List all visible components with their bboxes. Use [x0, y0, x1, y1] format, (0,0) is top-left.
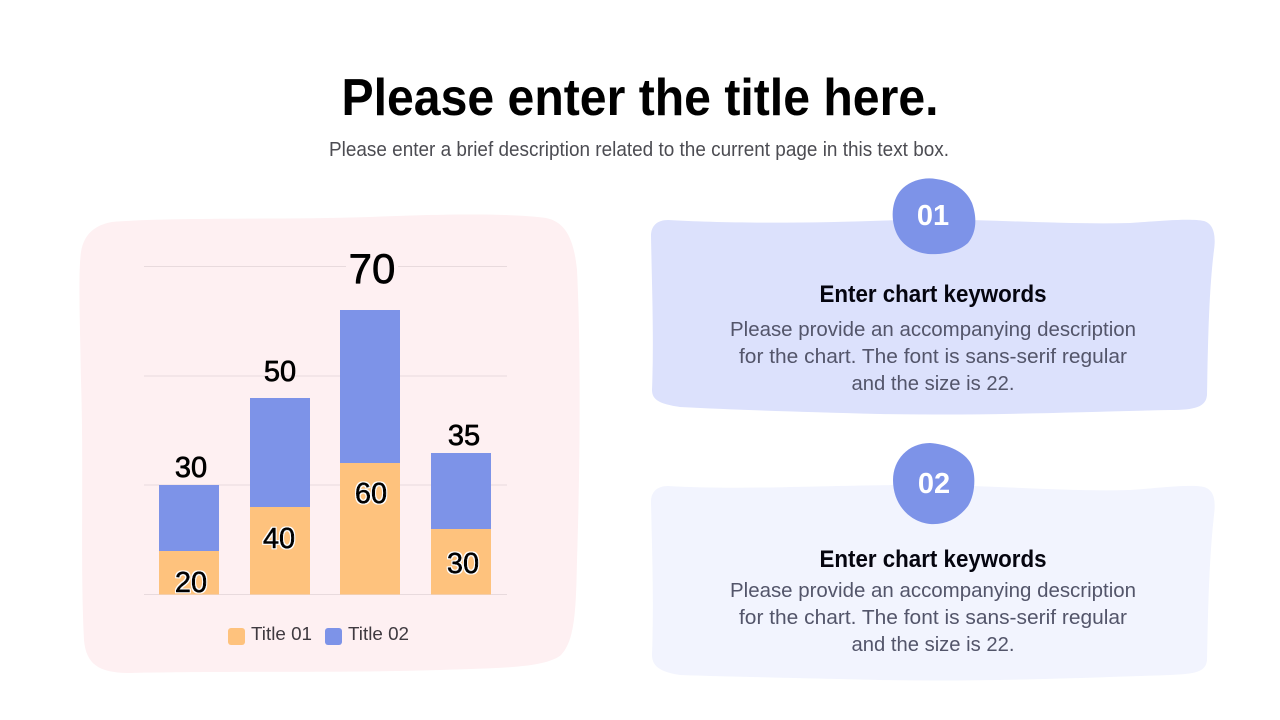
- panel: keyword 01: [651, 178, 1215, 415]
- card description: Please provide an accompanying description: [730, 580, 1136, 602]
- label 70: 70: [349, 245, 395, 292]
- legend text: Title 02: Title 02: [348, 624, 409, 644]
- bar: group 1: [159, 485, 219, 594]
- bar chart: [159, 310, 491, 594]
- value labels: 35: [448, 420, 480, 452]
- card description: for the chart. The font is sans-serif regular: [739, 607, 1127, 629]
- legend text: Title 01: Title 01: [251, 624, 312, 644]
- legend swatch: Title 01: [228, 628, 245, 645]
- card description: [730, 319, 1136, 395]
- gridlines: [144, 266, 507, 594]
- panel: keyword 02: [651, 443, 1215, 681]
- card description: Please provide an accompanying description: [730, 319, 1136, 341]
- card heading: Enter chart keywords: [820, 546, 1046, 573]
- value labels: 40: [263, 523, 295, 555]
- value labels: 30: [175, 452, 207, 484]
- bar: group 2: [250, 398, 310, 594]
- legend swatch: Title 02: [325, 628, 342, 645]
- card description: and the size is 22.: [852, 634, 1014, 656]
- card background: [651, 220, 1215, 415]
- panel: chart: [79, 214, 580, 673]
- card background: [651, 485, 1215, 681]
- value labels: 30: [447, 548, 479, 580]
- card description: [730, 580, 1136, 656]
- bar: group 4: [431, 453, 491, 594]
- card description: and the size is 22.: [852, 373, 1014, 395]
- subtitle: Please enter a brief description related to the current page in this text box.: [329, 139, 949, 161]
- bar: group 3: [340, 310, 400, 594]
- value labels: 20: [175, 567, 207, 599]
- badge 01: [893, 178, 975, 254]
- value labels: [175, 245, 480, 599]
- card heading: Enter chart keywords: [820, 281, 1046, 308]
- badge 02: [893, 443, 974, 524]
- title: Please enter the title here.: [342, 69, 938, 127]
- legend: [228, 624, 409, 645]
- badge 02: 02: [918, 468, 950, 500]
- value labels: 60: [355, 478, 387, 510]
- panel background: [79, 214, 580, 673]
- value labels: 50: [264, 356, 296, 388]
- badge 01: 01: [917, 200, 949, 232]
- card description: for the chart. The font is sans-serif regular: [739, 346, 1127, 368]
